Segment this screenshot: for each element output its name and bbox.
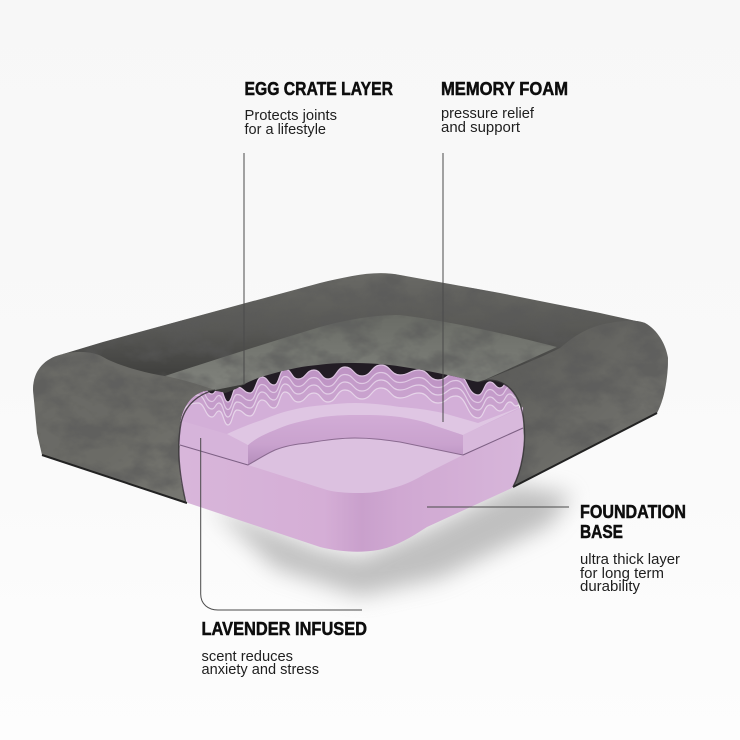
layer seam [180, 428, 523, 465]
base foam front side [179, 428, 524, 552]
memory foam left side [180, 421, 248, 465]
description: egg crate layer: for a lifestyle [244, 121, 326, 138]
memory foam inner curved side [248, 415, 463, 465]
description: foundation base: for long term [580, 565, 664, 582]
heading: egg crate layer: EGG CRATE LAYER [244, 78, 393, 99]
infographic canvas [33, 82, 686, 677]
egg crate row 3 [180, 372, 518, 420]
description: egg crate layer: Protects joints [244, 107, 337, 124]
description: lavender infused: scent reduces [202, 648, 293, 665]
description: lavender infused: anxiety and stress [202, 661, 319, 678]
label: lavender infused [201, 438, 367, 678]
base foam top surface [248, 438, 463, 493]
dog bed illustration [30, 270, 670, 552]
label: memory foam [441, 78, 568, 422]
seat cushion top [165, 315, 557, 390]
egg crate row 2 [180, 379, 518, 421]
description: foundation base: ultra thick layer [580, 551, 680, 568]
description: memory foam: pressure relief [441, 105, 535, 122]
heading: lavender infused: LAVENDER INFUSED [202, 618, 367, 639]
memory foam right side [463, 407, 523, 455]
velvet mottling texture [30, 270, 670, 505]
foundation base foam [179, 428, 524, 552]
label: egg crate layer [244, 78, 393, 385]
egg crate back row [170, 365, 532, 422]
heading: foundation base: BASE [580, 521, 623, 542]
egg crate front row [170, 388, 532, 445]
label: foundation base [427, 501, 686, 595]
description: memory foam: and support [441, 119, 521, 136]
bolster cut edge shadow [179, 380, 525, 503]
description: foundation base: durability [580, 578, 640, 595]
egg crate layer [170, 360, 532, 445]
heading: memory foam: MEMORY FOAM [441, 78, 568, 99]
bottom edge right [513, 413, 657, 487]
memory foam layer [180, 403, 523, 465]
ground shadow [210, 485, 572, 596]
back bolster [63, 273, 645, 395]
leader line: lavender infused [201, 438, 362, 610]
dark gap behind egg crate [197, 363, 520, 408]
inner curve shadow [248, 438, 463, 465]
left bolster [33, 352, 215, 503]
heading: foundation base: FOUNDATION [580, 501, 686, 522]
leader line: foundation base [427, 506, 569, 508]
leader line: egg crate layer [243, 153, 245, 385]
leader line: memory foam [442, 153, 444, 422]
bottom edge left [42, 455, 187, 503]
right bolster [480, 321, 668, 487]
memory foam top surface [227, 403, 523, 445]
